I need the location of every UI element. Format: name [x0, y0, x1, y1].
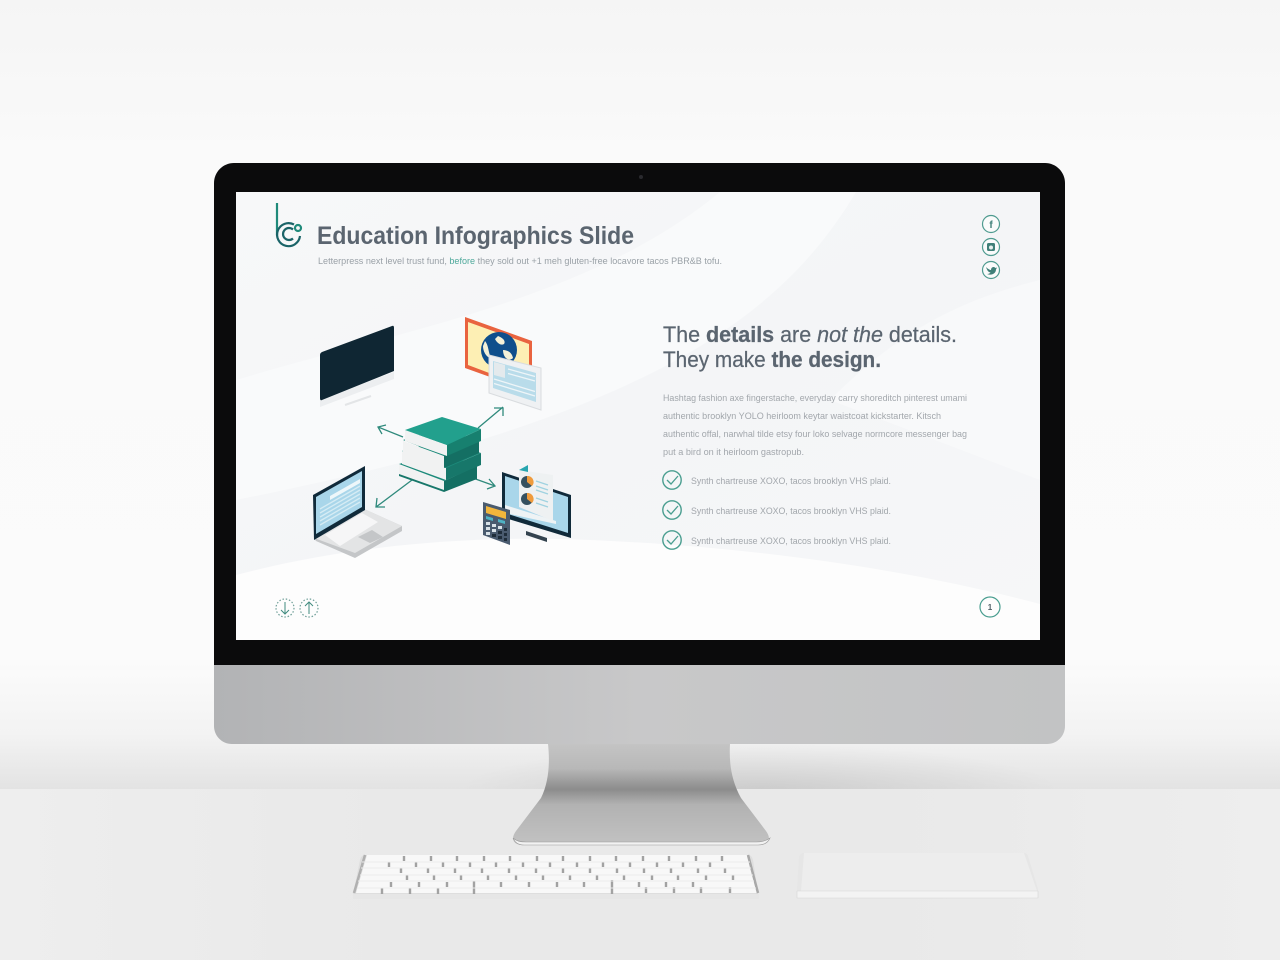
desktop monitor with document — [502, 465, 571, 542]
social icons — [982, 216, 1000, 278]
laptop — [313, 466, 402, 558]
keyboard — [353, 855, 759, 899]
navigation arrows — [276, 599, 318, 617]
heading: The details are not the details. — [663, 322, 957, 347]
checklist item 1 — [663, 471, 891, 489]
calculator — [483, 502, 510, 545]
document — [519, 465, 553, 521]
monitor bezel — [214, 163, 1065, 666]
checklist — [663, 471, 891, 549]
icon: twitter — [982, 262, 1000, 278]
book 2 — [403, 435, 479, 468]
subtitle: Letterpress next level trust fund, before they sold out +1 meh gluten-free locavore tacos PBR&B tofu. — [318, 256, 722, 267]
heading — [663, 322, 957, 372]
checklist item 3: Synth chartreuse XOXO, tacos brooklyn VHS plaid. — [691, 536, 891, 547]
body paragraph: Hashtag fashion axe fingerstache, everyday carry shoreditch pinterest umami — [663, 393, 967, 404]
book 1 — [405, 417, 481, 456]
framed globe — [465, 317, 532, 376]
book 4 — [399, 460, 477, 492]
book 3 — [402, 446, 481, 480]
title: Education Infographics Slide — [317, 222, 634, 250]
body paragraph — [663, 393, 967, 458]
slide screen — [236, 192, 1040, 640]
stack of books — [399, 417, 481, 492]
checklist item 1: Synth chartreuse XOXO, tacos brooklyn VHS plaid. — [691, 476, 891, 487]
page number: 1 — [988, 603, 993, 612]
page number — [980, 597, 1000, 617]
text block: right column — [663, 322, 967, 549]
body paragraph: authentic brooklyn YOLO heirloom keytar waistcoat kickstarter. Kitsch — [663, 411, 941, 422]
arrows — [376, 407, 503, 507]
trackpad — [797, 853, 1038, 898]
checklist item 2 — [663, 501, 891, 519]
body paragraph: put a bird on it heirloom gastropub. — [663, 447, 804, 458]
wall display — [320, 326, 394, 407]
icon: up arrow — [300, 599, 318, 617]
checklist item 2: Synth chartreuse XOXO, tacos brooklyn VHS plaid. — [691, 506, 891, 517]
icon: down arrow — [276, 599, 294, 617]
slide background — [236, 192, 1040, 640]
icon: facebook: f — [989, 220, 993, 231]
logo — [277, 203, 301, 246]
desk surface — [0, 789, 1280, 960]
monitor — [214, 163, 1065, 744]
wall shadow behind stand — [460, 744, 1060, 789]
checklist item 3 — [663, 531, 891, 549]
monitor stand — [513, 744, 770, 845]
monitor chin — [214, 665, 1065, 744]
illustration: education network — [313, 317, 571, 558]
icon: instagram — [982, 238, 1000, 256]
body paragraph: authentic offal, narwhal tilde etsy four loko selvage normcore messenger bag — [663, 429, 967, 440]
webcam — [639, 175, 643, 179]
tablet — [489, 355, 541, 410]
heading: They make the design. — [663, 347, 881, 372]
